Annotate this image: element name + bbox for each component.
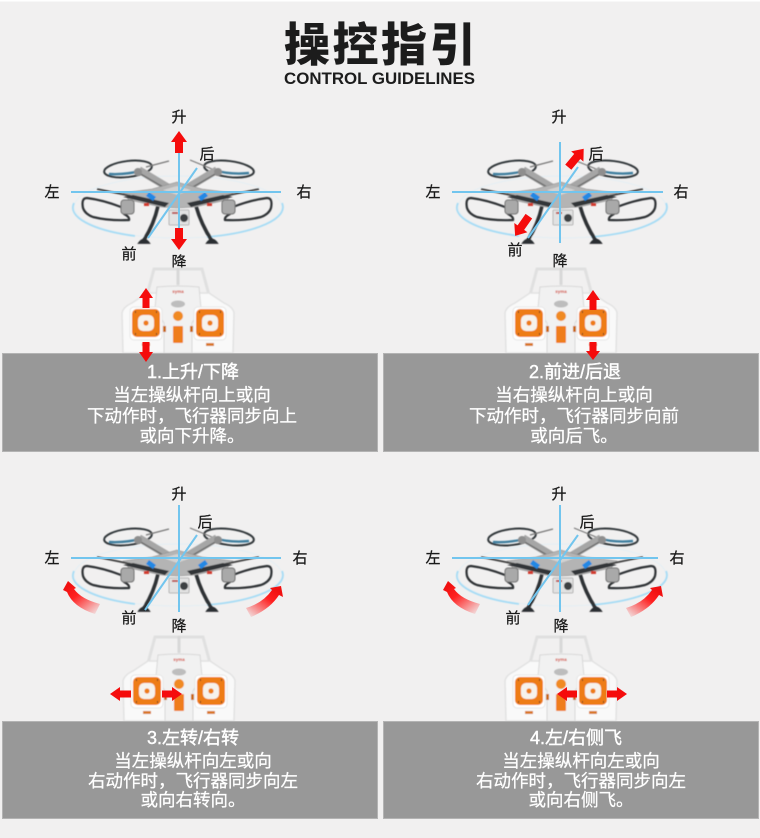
stick arrows bbox=[586, 290, 600, 360]
subtitle: CONTROL GUIDELINES bbox=[284, 69, 475, 88]
axes bbox=[452, 505, 658, 612]
drone illustration bbox=[73, 526, 283, 611]
caption text: 下动作时，飞行器同步向前 bbox=[469, 406, 679, 426]
drone illustration bbox=[457, 526, 667, 611]
remote controller bbox=[123, 636, 235, 721]
remote controller bbox=[122, 268, 234, 353]
caption text: 当左操纵杆向左或向 bbox=[502, 751, 660, 771]
caption text: 2.前进/后退 bbox=[529, 362, 621, 382]
caption box bbox=[384, 722, 758, 818]
direction labels: 前 bbox=[121, 246, 137, 263]
axes bbox=[71, 505, 281, 612]
curved red arrows bbox=[443, 581, 663, 617]
caption text: 4.左/右侧飞 bbox=[530, 728, 622, 748]
direction labels: 右 bbox=[669, 550, 685, 567]
axes bbox=[452, 142, 663, 243]
direction labels: 右 bbox=[292, 550, 308, 567]
direction labels: 右 bbox=[296, 184, 312, 201]
caption text: 或向下升降。 bbox=[140, 426, 244, 446]
panel: up / down bbox=[2, 109, 378, 452]
panel: strafe left / right bbox=[384, 486, 758, 818]
caption text bbox=[88, 728, 298, 810]
stick arrows bbox=[110, 687, 182, 701]
stick arrows bbox=[557, 687, 627, 701]
red arrows: up and down bbox=[171, 131, 187, 250]
direction labels: 升 bbox=[551, 109, 567, 126]
direction labels: 后 bbox=[588, 146, 604, 163]
direction labels: 前 bbox=[507, 242, 523, 259]
direction labels: 左 bbox=[44, 550, 60, 567]
caption text: 或向右侧飞。 bbox=[528, 790, 634, 810]
title: 操控指引 bbox=[284, 19, 478, 71]
panel: forward / back bbox=[384, 109, 758, 452]
direction labels: 左 bbox=[44, 184, 60, 201]
stick arrows bbox=[139, 288, 153, 362]
caption text: 1.上升/下降 bbox=[147, 362, 239, 382]
direction labels: 左 bbox=[425, 550, 441, 567]
caption text: 下动作时，飞行器同步向上 bbox=[87, 406, 297, 426]
caption text: 或向后飞。 bbox=[530, 426, 618, 446]
remote controller bbox=[505, 268, 617, 353]
caption text bbox=[476, 728, 686, 810]
panel: turn left / right bbox=[2, 486, 378, 818]
direction labels: 降 bbox=[171, 254, 187, 271]
direction labels bbox=[44, 486, 308, 635]
direction labels: 后 bbox=[197, 514, 213, 531]
caption text: 当左操纵杆向左或向 bbox=[114, 751, 272, 771]
caption text bbox=[87, 362, 297, 446]
direction labels: 后 bbox=[579, 514, 595, 531]
caption text: 3.左转/右转 bbox=[147, 728, 239, 748]
red arrows: back and forward bbox=[509, 144, 590, 240]
direction labels: 升 bbox=[171, 109, 187, 126]
direction labels bbox=[425, 486, 685, 635]
caption text: 右动作时，飞行器同步向左 bbox=[476, 771, 686, 791]
caption box bbox=[2, 722, 378, 818]
direction labels: 升 bbox=[171, 486, 187, 503]
direction labels: 降 bbox=[552, 253, 568, 270]
axes bbox=[71, 153, 281, 238]
direction labels: 降 bbox=[171, 618, 187, 635]
drone illustration bbox=[457, 158, 667, 243]
curved red arrows bbox=[63, 581, 283, 617]
direction labels: 后 bbox=[199, 146, 215, 163]
direction labels: 右 bbox=[673, 184, 689, 201]
direction labels: 前 bbox=[121, 610, 137, 627]
direction labels: 降 bbox=[553, 618, 569, 635]
direction labels bbox=[425, 109, 689, 270]
caption box bbox=[2, 354, 378, 452]
remote controller bbox=[505, 636, 617, 721]
drone illustration bbox=[73, 158, 283, 243]
caption text: 当右操纵杆向上或向 bbox=[495, 385, 653, 405]
caption text: 当左操纵杆向上或向 bbox=[113, 385, 271, 405]
caption text: 右动作时，飞行器同步向左 bbox=[88, 771, 298, 791]
caption text bbox=[469, 362, 679, 446]
direction labels: 前 bbox=[505, 610, 521, 627]
direction labels: 左 bbox=[425, 184, 441, 201]
caption text: 或向右转向。 bbox=[140, 790, 246, 810]
direction labels bbox=[44, 109, 312, 271]
caption box bbox=[384, 354, 758, 452]
direction labels: 升 bbox=[551, 486, 567, 503]
